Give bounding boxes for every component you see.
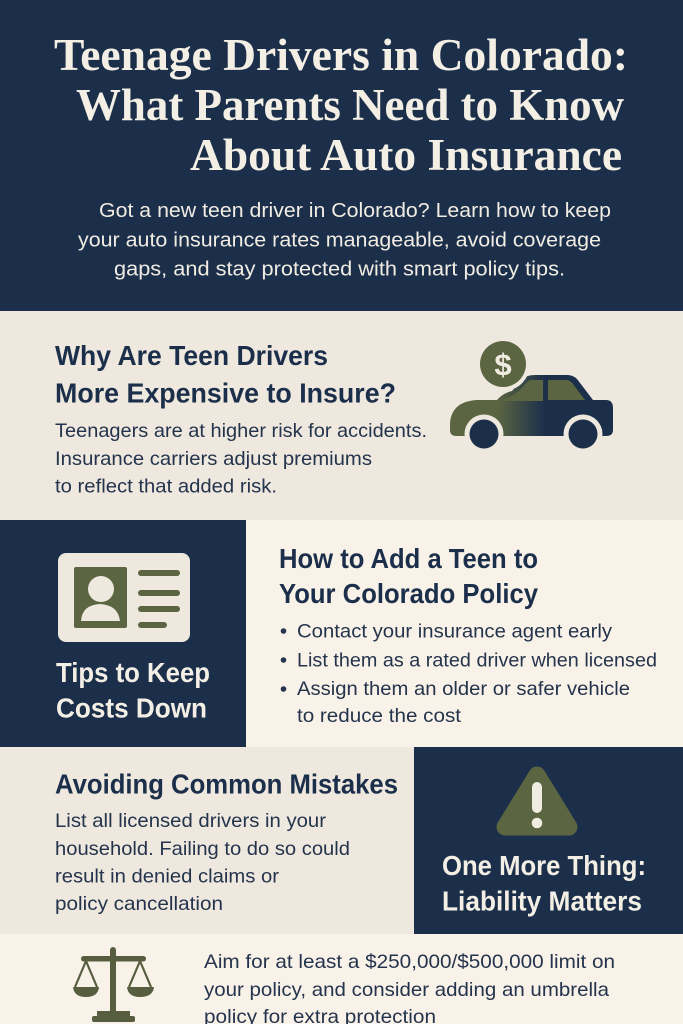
- text: coverage limits: your policy, and consider adding an umbrella: [204, 979, 609, 1001]
- text: teen risk: Teenagers are at higher risk for accidents.: [55, 420, 427, 442]
- heading: why teens cost more: More Expensive to Insure?: [55, 378, 396, 408]
- icon: car with dollar coin: $: [494, 347, 512, 382]
- bullet list: List them as a rated driver when licensed: [297, 650, 657, 672]
- heading: why teens cost more: [55, 340, 396, 408]
- text: avoiding mistakes: result in denied claims or: [55, 866, 280, 888]
- title: Teenage Drivers in Colorado:: [54, 30, 628, 80]
- heading: add a teen: Your Colorado Policy: [279, 578, 538, 609]
- heading: liability: One More Thing:: [442, 850, 646, 881]
- text: avoiding mistakes: [55, 810, 350, 915]
- bullet list: Contact your insurance agent early: [297, 620, 612, 642]
- heading: avoiding mistakes: Avoiding Common Mistakes: [55, 768, 398, 800]
- panel: header: [0, 0, 683, 311]
- text: avoiding mistakes: household. Failing to do so could: [55, 838, 350, 860]
- title: [54, 30, 628, 180]
- heading: add a teen: How to Add a Teen to: [279, 543, 538, 574]
- bullet list: to reduce the cost: [297, 705, 462, 727]
- heading: liability: Liability Matters: [442, 886, 642, 916]
- heading: liability: [442, 850, 646, 916]
- panel: add a teen: [246, 520, 683, 747]
- text: avoiding mistakes: policy cancellation: [55, 893, 223, 915]
- panel: tips to keep costs down: [0, 520, 246, 747]
- text: teen risk: to reflect that added risk.: [55, 476, 277, 498]
- text: coverage limits: [204, 951, 615, 1024]
- subtitle: gaps, and stay protected with smart policy tips.: [114, 258, 565, 280]
- panel: liability: [414, 747, 683, 934]
- subtitle: [78, 200, 611, 280]
- subtitle: your auto insurance rates manageable, avoid coverage: [78, 230, 601, 252]
- title: About Auto Insurance: [190, 130, 622, 180]
- bullet list: Assign them an older or safer vehicle: [297, 678, 630, 700]
- heading: tips to keep costs down: [56, 657, 210, 724]
- text: coverage limits: Aim for at least a $250,000/$500,000 limit on: [204, 951, 615, 973]
- icon: id card: [58, 553, 190, 642]
- heading: why teens cost more: Why Are Teen Drivers: [55, 340, 328, 371]
- panel: coverage limits: [0, 934, 683, 1024]
- text: avoiding mistakes: List all licensed drivers in your: [55, 810, 327, 832]
- heading: add a teen: [279, 543, 538, 609]
- text: teen risk: Insurance carriers adjust premiums: [55, 448, 372, 470]
- panel: avoiding mistakes: [0, 747, 414, 934]
- panel: why teens cost more: [0, 311, 683, 520]
- icon: warning triangle: [505, 775, 569, 828]
- heading: tips to keep costs down: Costs Down: [56, 692, 207, 724]
- heading: tips to keep costs down: Tips to Keep: [56, 657, 210, 688]
- icon: scales: [73, 947, 154, 1022]
- icon: car with dollar coin: [450, 337, 613, 454]
- bullet list: [281, 620, 657, 727]
- subtitle: Got a new teen driver in Colorado? Learn how to keep: [99, 200, 611, 222]
- title: What Parents Need to Know: [76, 80, 625, 130]
- text: teen risk: [55, 420, 427, 498]
